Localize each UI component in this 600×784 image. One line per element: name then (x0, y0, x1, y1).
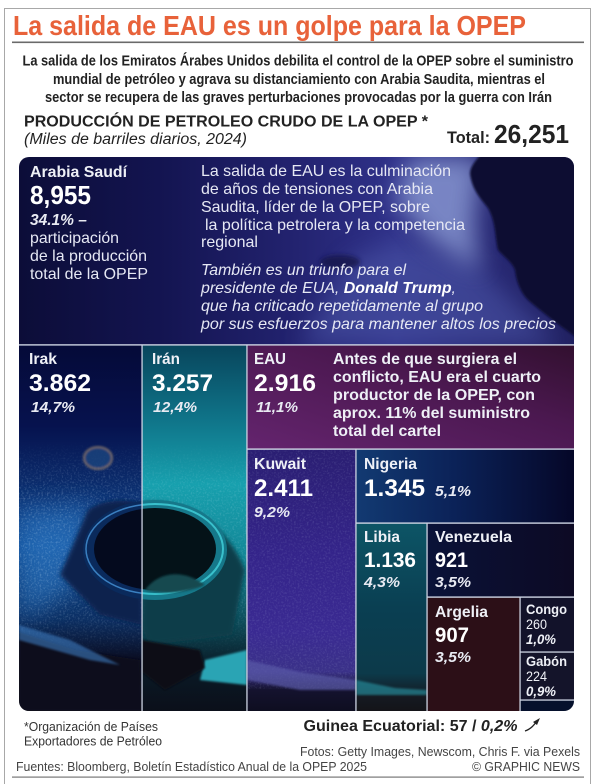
text: tensiones con Arabia Saudita: La salida de EAU es la culminación (201, 163, 451, 180)
text: tensiones con Arabia Saudita: la política petrolera y la competencia (205, 217, 465, 234)
Arabia Saudí data (30, 164, 148, 283)
Nigeria data (364, 456, 471, 502)
Venezuela data: Venezuela (435, 529, 512, 546)
panel: Congo background (520, 597, 574, 652)
text: EAU cuarto productor: productor de la OPEP, con (333, 387, 535, 404)
text: EAU cuarto productor: Antes de que surgiera el (333, 351, 517, 368)
intro text (22, 52, 574, 106)
total: Total: (447, 129, 490, 147)
Nigeria data: 1.345 (364, 475, 425, 502)
panel: Guinea Ecuatorial sliver (520, 700, 574, 711)
text: triunfo para Donald Trump: que ha criticado repetidamente al grupo (201, 298, 483, 315)
panel: Nigeria background (356, 449, 574, 523)
total: 26,251 (494, 119, 569, 149)
footnote: Exportadores de Petróleo (24, 734, 162, 748)
EAU data (254, 351, 316, 416)
Venezuela data (435, 529, 512, 591)
Venezuela data: 921 (435, 548, 468, 572)
chart heading (24, 112, 429, 148)
Irán data: 12,4% (153, 400, 197, 416)
bottom rule (12, 776, 584, 778)
Congo data: 260 (526, 617, 547, 632)
Libia data: 1.136 (364, 548, 416, 572)
Congo data: 1,0% (526, 632, 556, 647)
text: EAU cuarto productor: total del cartel (333, 423, 441, 440)
Irán data: Irán (152, 351, 180, 368)
sources: Fuentes: Bloomberg, Boletín Estadístico Anual de la OPEP 2025 (16, 759, 367, 774)
EAU data: 2.916 (254, 370, 316, 397)
text: tensiones con Arabia Saudita: de años de tensiones con Arabia (201, 181, 433, 198)
Arabia Saudí data: de la producción (30, 248, 147, 265)
text: EAU cuarto productor: conflicto, EAU era el cuarto (333, 369, 541, 386)
footnote: *Organización de Países (24, 719, 158, 734)
Kuwait data: 9,2% (254, 505, 290, 521)
footnote (24, 719, 162, 748)
Argelia data: 907 (435, 623, 469, 647)
Congo data: Congo (526, 602, 567, 617)
arrow: Guinea Ecuatorial (525, 718, 540, 731)
photo credits: Fotos: Getty Images, Newscom, Chris F. via Pexels (300, 744, 580, 759)
Venezuela data: 3,5% (435, 575, 471, 591)
panel: Irán background photo (142, 345, 247, 711)
total (447, 119, 569, 149)
treemap panel (19, 150, 580, 711)
Argelia data: 3,5% (435, 650, 471, 666)
Arabia Saudí data: total de la OPEP (30, 266, 148, 283)
chart heading: PRODUCCIÓN DE PETROLEO CRUDO DE LA OPEP * (24, 112, 429, 130)
panel: Venezuela background (427, 523, 574, 597)
panel: Gabón background (520, 652, 574, 700)
Kuwait data: 2.411 (254, 475, 313, 502)
Arabia Saudí data: Arabia Saudí (30, 164, 128, 181)
Kuwait data (254, 456, 313, 521)
text: EAU cuarto productor (333, 351, 541, 440)
Irak data (29, 351, 91, 416)
text: tensiones con Arabia Saudita: Saudita, líder de la OPEP, sobre (201, 199, 430, 216)
Gabón data: 0,9% (526, 684, 556, 699)
Argelia data: Argelia (435, 604, 488, 621)
title: La salida de EAU es un golpe para la OPEP (13, 10, 526, 41)
Irak data: 3.862 (29, 370, 91, 397)
panel: Kuwait background (247, 449, 356, 711)
text: triunfo para Donald Trump: También es un triunfo para el (201, 262, 406, 279)
text: tensiones con Arabia Saudita (201, 163, 465, 251)
oil pipe ring photo (19, 440, 247, 711)
panel: Irak background photo (19, 345, 142, 711)
Irak data: Irak (29, 351, 57, 368)
Gabón data: Gabón (526, 654, 567, 669)
copyright: © GRAPHIC NEWS (472, 759, 580, 774)
panel: Argelia background (427, 597, 520, 711)
text: triunfo para Donald Trump: por sus esfuerzos para mantener altos los precios (200, 316, 556, 333)
Irán data (152, 351, 213, 416)
panel: EAU background (247, 345, 574, 449)
Guinea Ecuatorial label: Guinea Ecuatorial: 57 / 0,2% (304, 718, 518, 735)
text: EAU cuarto productor: aprox. 11% del suministro (333, 405, 530, 422)
Libia data: Libia (364, 529, 400, 546)
Arabia Saudí data: participación (30, 230, 119, 247)
panel: Arabia Saudí background photo (19, 150, 580, 345)
EAU data: 11,1% (256, 400, 298, 416)
EAU data: EAU (254, 351, 286, 368)
chart heading: (Miles de barriles diarios, 2024) (24, 131, 247, 148)
Gabón data: 224 (526, 669, 547, 684)
text: triunfo para Donald Trump (200, 262, 556, 333)
Arabia Saudí data: 8,955 (30, 180, 91, 210)
Kuwait data: Kuwait (254, 456, 306, 473)
Libia data: 4,3% (363, 575, 400, 591)
text: tensiones con Arabia Saudita: regional (201, 234, 258, 251)
Argelia data (435, 604, 488, 666)
Irak data: 14,7% (31, 400, 75, 416)
Nigeria data: 5,1% (435, 484, 471, 500)
Libia data (363, 529, 416, 591)
text: triunfo para Donald Trump: presidente de EUA, Donald Trump, (200, 280, 456, 297)
Congo data (526, 602, 567, 647)
panel: Libia background (356, 523, 427, 711)
Irán data: 3.257 (152, 370, 213, 397)
Nigeria data: Nigeria (364, 456, 417, 473)
Gabón data (526, 654, 567, 699)
Arabia Saudí data: 34.1% – (30, 212, 87, 229)
